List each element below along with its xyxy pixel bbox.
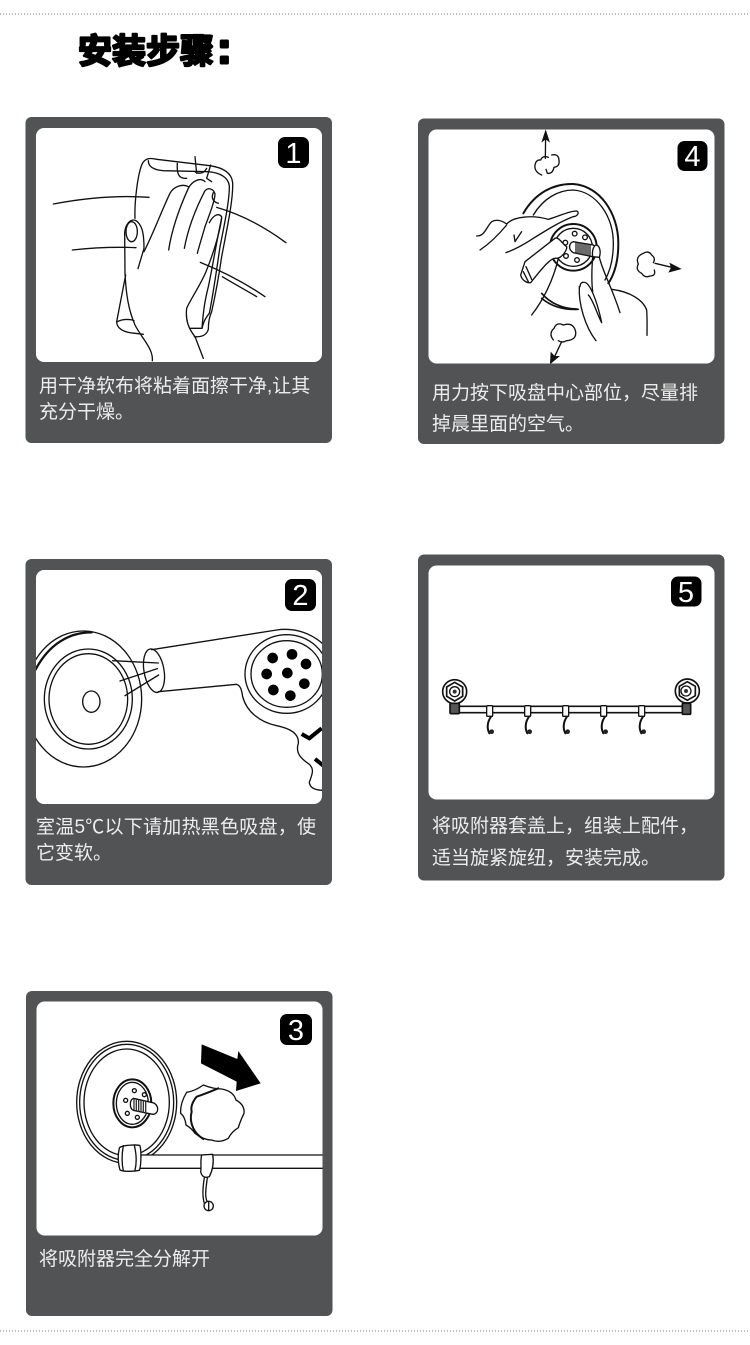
caption: step 2: 室温5℃以下请加热黑色吸盘，使	[36, 816, 316, 838]
icon: air cloud right	[637, 252, 682, 277]
caption: step 2: 它变软。	[36, 842, 112, 864]
panel: step 4	[418, 118, 724, 444]
illustration: pressing suction cup	[477, 129, 682, 364]
illustration: disassembled parts	[77, 1041, 325, 1211]
caption: step 4: 用力按下吸盘中心部位，尽量排	[432, 382, 698, 404]
illustration: hand wiping with cloth	[53, 157, 286, 361]
badge: 3	[280, 1014, 312, 1047]
icon: air cloud bottom	[550, 324, 576, 364]
hook	[201, 1154, 213, 1211]
caption: step 1: 用干净软布将粘着面擦干净,让其	[39, 375, 310, 397]
arrow	[201, 1044, 261, 1091]
badge: 1: 1	[285, 138, 302, 170]
badge: 3: 3	[288, 1015, 304, 1047]
badge: 4	[678, 141, 708, 173]
panel: step 1	[26, 117, 332, 443]
suction mount right	[675, 679, 699, 714]
panel: step 3	[26, 991, 332, 1316]
badge: 1	[278, 137, 309, 170]
icon: air cloud top	[535, 129, 559, 175]
rail	[138, 1155, 325, 1168]
illustration: assembled hook rail	[443, 679, 699, 734]
panel: step 2	[25, 559, 332, 885]
illustration: hair dryer heating suction cup	[25, 629, 328, 790]
badge: 5: 5	[678, 577, 694, 609]
title: 安装步骤:	[78, 24, 232, 73]
caption: step 4: 掉晨里面的空气。	[432, 413, 584, 435]
caption: step 1: 充分干燥。	[39, 401, 134, 423]
caption: step 3: 将吸附器完全分解开	[39, 1248, 210, 1270]
badge: 4: 4	[684, 141, 701, 173]
badge: 2	[285, 579, 316, 612]
caption: step 5: 适当旋紧旋纽，安装完成。	[432, 847, 660, 869]
badge: 5	[671, 576, 702, 609]
suction mount left	[443, 680, 467, 714]
knob	[181, 1085, 244, 1141]
badge: 2: 2	[292, 580, 309, 612]
panel: step 5	[418, 554, 724, 880]
hooks	[487, 706, 646, 734]
caption: step 5: 将吸附器套盖上，组装上配件，	[432, 815, 698, 837]
